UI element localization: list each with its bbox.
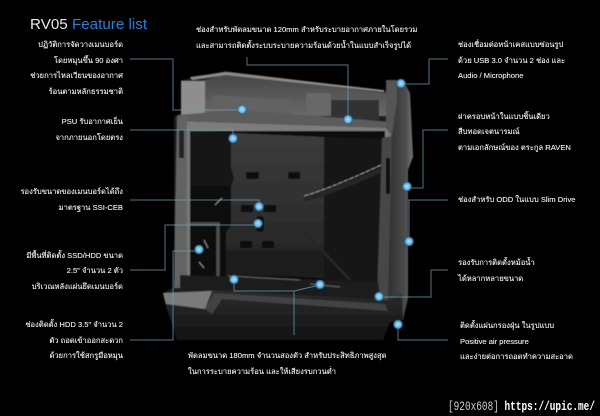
text: dust filter: Positive air pressure xyxy=(460,337,529,346)
top compartment right recess xyxy=(331,100,379,120)
base left lip xyxy=(163,291,212,309)
dot: 120mm fan xyxy=(342,114,354,126)
dot: PSU xyxy=(228,134,238,144)
dot: radiator xyxy=(374,292,384,302)
dot: motherboard orientation xyxy=(236,104,248,116)
callout lines xyxy=(130,57,448,340)
title: RV05 Feature list xyxy=(30,16,148,33)
text: SSI-CEB: มาตรฐาน SSI-CEB xyxy=(59,203,123,212)
front pillar inner xyxy=(377,136,392,300)
line: front cover xyxy=(407,130,448,188)
lower beam xyxy=(178,121,391,140)
text: HDD 3.5: ด้วยการใช้สกรูมือหมุน xyxy=(49,351,123,360)
text: ODD: ช่องสำหรับ ODD ในแบบ Slim Drive xyxy=(458,195,575,204)
line: dust filter xyxy=(398,325,448,340)
text: front I/O: Audio / Microphone xyxy=(458,71,523,80)
floor highlights xyxy=(228,276,340,287)
text: dust filter: และง่ายต่อการถอดทำความสะอาด xyxy=(460,352,573,361)
dot: HDD 3.5 xyxy=(194,244,204,256)
drive cage xyxy=(181,224,218,276)
line: ODD xyxy=(409,200,448,242)
dot: ODD xyxy=(404,236,414,248)
text: PSU: จากภายนอกโดยตรง xyxy=(55,133,123,142)
upper beam xyxy=(178,110,391,128)
text: 180mm fans: ในการระบายความร้อน และให้เสียงรบกวนต่ำ xyxy=(188,366,336,376)
text: front I/O: ช่องเชื่อมต่อหน้าเคสแบบซ่อนรูป xyxy=(458,39,564,49)
text: front cover: ฝาครอบหน้าในแบบชิ้นเดียว xyxy=(458,111,550,121)
base shroud xyxy=(163,290,403,340)
front top block xyxy=(386,80,397,136)
line: SSI-CEB xyxy=(130,200,259,207)
cable highlight xyxy=(304,165,381,196)
dot: SSD/HDD xyxy=(252,218,264,230)
computer case illustration xyxy=(163,71,413,340)
tray lower shade xyxy=(226,250,324,276)
front pillar slot xyxy=(386,158,390,194)
drive cage ties xyxy=(199,198,222,268)
line: SSD/HDD xyxy=(130,225,258,270)
line: PSU xyxy=(130,130,233,139)
top compartment rear shade xyxy=(212,95,290,114)
top compartment xyxy=(204,74,386,116)
text: 120mm fan: ช่องสำหรับพัดลมขนาด 120mm สำหรับระบายอากาศภายในโดยรวม xyxy=(196,25,417,34)
base trim line xyxy=(205,293,388,314)
line: HDD 3.5 xyxy=(130,251,199,340)
text: dust filter: ติดตั้งแผ่นกรองฝุ่น ในรูปแบบ xyxy=(460,320,554,330)
text: SSD/HDD: บริเวณหลังแผ่นยึดเมนบอร์ด xyxy=(32,282,123,291)
top left panel xyxy=(181,81,205,116)
left rear pillar xyxy=(174,116,187,288)
text: PSU: PSU รับอากาศเย็น xyxy=(62,116,123,126)
line: motherboard orientation xyxy=(130,59,242,110)
case silhouette xyxy=(163,71,413,340)
dot: 180mm fan left xyxy=(228,274,240,286)
text: 120mm fan: และสามารถติดตั้งระบบระบายความร้อนด้วยน้ำในแบบสำเร็จรูปได้ xyxy=(196,40,411,50)
text: front I/O: ด้วย USB 3.0 จำนวน 2 ช่อง และ xyxy=(458,56,565,65)
cable bundle xyxy=(304,170,381,199)
callout dots xyxy=(194,78,414,330)
line: radiator xyxy=(379,270,448,297)
motherboard tray xyxy=(226,133,324,278)
left pillar slot xyxy=(179,130,184,158)
dot: SSI-CEB xyxy=(254,202,264,212)
text: front cover: ตามเอกลักษณ์ของ ตระกูล RAVEN xyxy=(458,143,571,152)
front bezel xyxy=(388,80,413,322)
text: HDD 3.5: ตัว ถอดเข้าออกสะดวก xyxy=(49,336,123,345)
text: motherboard orientation: ช่วยการไหลเวียนของอากาศ xyxy=(30,71,123,80)
left pillar second strip xyxy=(187,131,190,288)
top compartment bracket xyxy=(306,93,331,116)
text: SSD/HDD: มีพื้นที่ติดตั้ง SSD/HDD ขนาด xyxy=(26,250,123,260)
text: SSI-CEB: รองรับขนาดของเมนบอร์ดได้ถึง xyxy=(20,187,123,196)
text: front cover: สืบทอดเจตนารมณ์ xyxy=(458,127,520,136)
text: HDD 3.5: ช่องติดตั้ง HDD 3.5" จำนวน 2 xyxy=(25,319,123,329)
top rail xyxy=(190,72,384,92)
text: radiator: ได้หลากหลายขนาด xyxy=(457,274,523,283)
text: motherboard orientation: ร้อนตามหลักธรรมชาติ xyxy=(49,87,123,96)
dot: front I/O xyxy=(396,78,406,90)
dot: 180mm fan right xyxy=(314,280,326,290)
text: SSD/HDD: 2.5" จำนวน 2 ตัว xyxy=(67,266,123,275)
dot: front cover xyxy=(402,182,412,192)
line: front I/O xyxy=(401,59,448,84)
line: 120mm fan xyxy=(247,57,348,120)
floor xyxy=(180,275,380,296)
brace arm xyxy=(305,232,350,280)
text: 180mm fans: พัดลมขนาด 180mm จำนวนสองตัว สำหรับประสิทธิภาพสูงสุด xyxy=(188,351,387,360)
line: 180mm fans xyxy=(234,280,320,335)
dark interior xyxy=(188,131,385,294)
tray left upper panel xyxy=(190,131,234,186)
text: motherboard orientation: ปฏิวัติการจัดวางเมนบอร์ด xyxy=(38,40,123,49)
text: radiator: รองรับการติดตั้งหม้อน้ำ xyxy=(458,257,535,267)
tray openings xyxy=(240,172,300,248)
dot: dust filter xyxy=(392,320,404,330)
text: motherboard orientation: โดยหมุนขึ้น 90 องศา xyxy=(54,55,123,65)
right interior xyxy=(324,137,382,290)
